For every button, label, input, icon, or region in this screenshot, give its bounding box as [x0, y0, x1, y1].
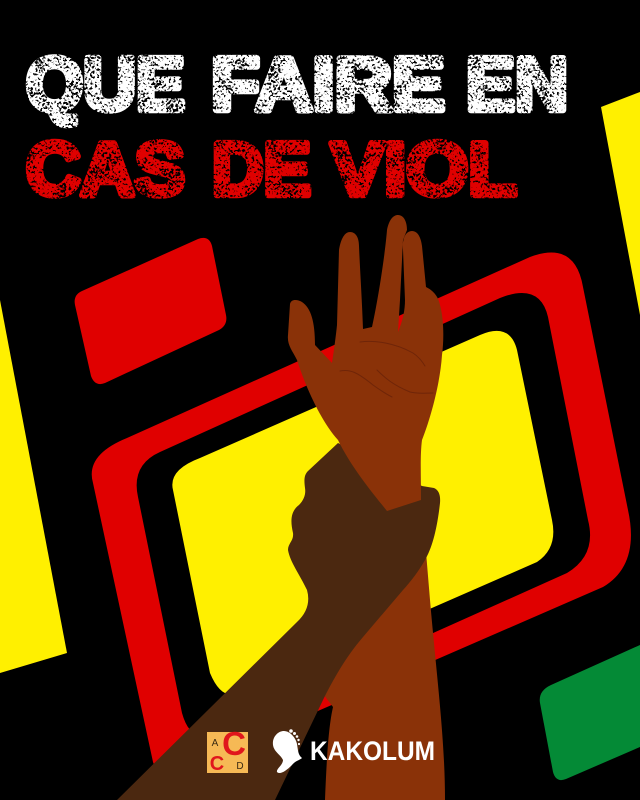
palm lines: [340, 341, 433, 397]
title line 2: cas de viol: [26, 127, 517, 211]
frame: yellow centre: [172, 331, 553, 695]
wordmark: KAKOLUM: [310, 736, 435, 766]
title line 1: que faire en: QUE: [26, 42, 185, 126]
icon: Africa footprint: [273, 729, 302, 773]
logo: Kakolum: [273, 729, 435, 773]
frame: red outer: [92, 252, 631, 774]
raised hand: [288, 215, 443, 511]
yellow shape: right edge: [601, 92, 640, 315]
title line 2: cas de viol: CAS: [26, 127, 185, 211]
title line 2: cas de viol: DE: [212, 127, 311, 211]
victim forearm: [320, 540, 445, 800]
title: [26, 42, 568, 211]
logo: ACCD: D: [236, 761, 244, 772]
title line 1: que faire en: FAIRE: [211, 42, 445, 126]
logo: ACCD: C: [222, 725, 246, 762]
title line 2: cas de viol: VIOL: [331, 127, 517, 211]
frame: black band: [137, 293, 590, 735]
aggressor arm gripping wrist: [117, 443, 440, 800]
logo: ACCD: A: [212, 738, 219, 749]
red rounded block: [75, 238, 226, 384]
logo: ACCD: [207, 725, 248, 775]
green rounded block: [540, 645, 640, 780]
yellow shape: left edge: [0, 300, 67, 673]
title line 1: que faire en: [26, 42, 568, 126]
title line 1: que faire en: EN: [466, 42, 568, 126]
logo: ACCD: C: [210, 753, 224, 775]
illustration: hands: [117, 215, 445, 800]
concentric frame: [92, 252, 631, 774]
